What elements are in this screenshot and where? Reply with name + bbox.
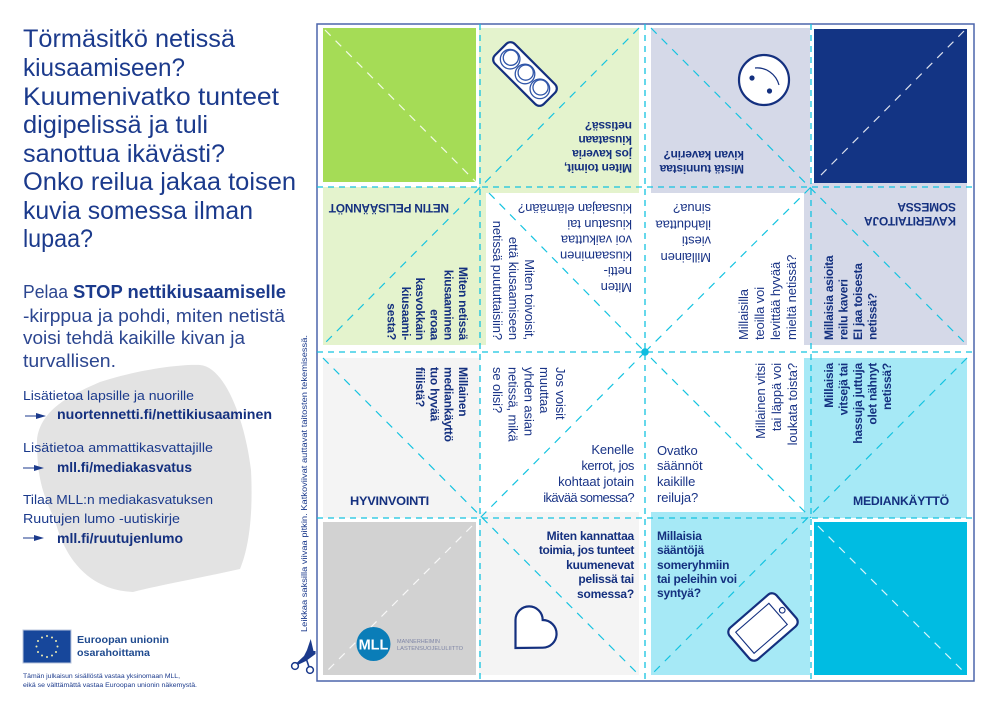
question: spreading good: teoilla voi (752, 287, 767, 340)
panel: online rules (323, 187, 486, 345)
heading: friendship skills: SOMESSA (897, 200, 956, 214)
question: group rules: tai peleihin voi (657, 572, 737, 586)
question: joke hurting: Millainen vitsi (753, 363, 768, 439)
question: intervening: Miten toivoisit, (522, 259, 537, 340)
question: who to tell: Kenelle (591, 442, 634, 457)
question: fair rules: kaikille (657, 474, 695, 489)
link: young people: nuortennetti.fi/nettikiusaaminen (57, 406, 272, 422)
heading: friendship skills: KAVERITAITOJA (864, 214, 956, 228)
question: who to tell: kerrot, jos (581, 458, 635, 473)
question: change one thing: yhden asian (521, 367, 536, 436)
question: good friend: Mistä tunnistaa (659, 162, 744, 176)
MLL logo: LASTENSUOJELULIITTO (397, 646, 464, 652)
title: lupaa? (23, 225, 93, 253)
icon: scissors (292, 639, 316, 673)
question: group rules: syntyä? (657, 586, 701, 600)
icon: tablet (726, 591, 800, 663)
intro text: -kirppua ja pohdi, miten netistä (23, 306, 286, 326)
icon: smiley (739, 55, 789, 105)
link: newsletter: Tilaa MLL:n mediakasvatuksen (23, 492, 213, 507)
question: heated feelings: kuumenevat (566, 558, 634, 572)
question: heated feelings: somessa? (577, 587, 634, 601)
question: change one thing: Jos voisit (553, 367, 568, 420)
question: change one thing: muuttaa (537, 367, 552, 414)
EU logo: osarahoittama (77, 648, 150, 659)
question: message: sinua? (673, 201, 711, 216)
question: joke hurting: tai läppä voi (769, 363, 784, 431)
question: fair rules: Ovatko (657, 443, 698, 458)
question: intervening: että kiusaamiseen (506, 237, 521, 340)
panel: heart flap (479, 512, 639, 675)
question: change one thing: se olisi? (490, 367, 505, 413)
grey blob background (37, 365, 252, 592)
EU logo: Euroopan unionin (77, 635, 169, 646)
question: media use wellbeing: tuo hyvää (427, 367, 441, 422)
question: heated feelings: Miten kannattaa (547, 529, 635, 543)
question: heated feelings: toimia, jos tunteet (539, 543, 634, 557)
link: young people: Lisätietoa lapsille ja nuorille (23, 388, 194, 403)
question: online vs face to face: kasvokkain (413, 277, 427, 340)
question: spreading good: levittää hyvää (768, 261, 783, 340)
icon: traffic light (491, 40, 559, 108)
panel: traffic light flap (479, 28, 639, 193)
question: impact of bullying: voi vaikuttaa (560, 233, 632, 248)
question: fair friend: EI jaa toisesta (851, 263, 865, 340)
panel: grey corner (323, 522, 476, 675)
title: sanottua ikävästi? (23, 140, 225, 168)
panel: green corner (323, 28, 476, 182)
question: friend bullied: netissä? (585, 119, 632, 133)
question: online vs face to face: kiusaami- (399, 287, 413, 340)
heading: online rules: NETIN PELISÄÄNNÖT (328, 201, 449, 216)
title (23, 25, 296, 253)
link: professionals: mll.fi/mediakasvatus (57, 459, 192, 475)
left column intro (23, 25, 296, 371)
heading: wellbeing: HYVINVOINTI (350, 494, 429, 508)
question: impact of bullying: Miten (601, 280, 632, 295)
title: digipelissä ja tuli (23, 111, 208, 139)
question: who to tell: kohtaat jotain (558, 474, 634, 489)
panel: media use (804, 358, 967, 518)
title: kiusaamiseen? (23, 54, 185, 82)
question: online vs face to face: kiusaaminen (442, 270, 456, 340)
question: fair friend: Millaisia asioita (822, 255, 836, 340)
title: Törmäsitkö netissä (23, 25, 235, 53)
link: newsletter (23, 492, 213, 546)
question: fair rules: säännöt (657, 458, 703, 473)
center fold dot (641, 348, 649, 356)
question: spreading good: mieltä netissä? (784, 255, 799, 340)
links block (23, 388, 272, 546)
intro text: voisi tehdä kaikille kivan ja (23, 328, 246, 348)
question: message: viesti (682, 234, 711, 249)
question: group rules: Millaisia (657, 529, 702, 543)
question: impact of bullying: netti- (604, 264, 632, 279)
sheet frame (317, 24, 974, 681)
question: friend bullied: kiusataan (579, 133, 632, 147)
intro text (23, 282, 286, 371)
question: friend bullied: jos kaveria (572, 147, 633, 161)
question: media use wellbeing: fiilistä? (413, 367, 427, 407)
question: media use wellbeing: Millainen (456, 367, 470, 416)
MLL logo: MLL (359, 638, 389, 654)
question: fair rules: reiluja? (657, 490, 698, 505)
MLL logo: MANNERHEIMIN (397, 639, 440, 645)
title: Kuumenivatko tunteet (23, 83, 279, 111)
cutting instruction: Leikkaa saksilla viivaa pitkin. Katkoviivat auttavat taitosten tekemisessä. (299, 335, 309, 632)
question: heated feelings: pelissä tai (578, 572, 634, 586)
link: professionals (23, 440, 213, 475)
intro text: STOP nettikiusaamiselle (73, 282, 286, 302)
question: impact of bullying: kiusaajan elämään? (518, 201, 632, 216)
question: message: Millainen (661, 250, 711, 265)
link: newsletter: Ruutujen lumo -uutiskirje (23, 511, 180, 526)
question: online vs face to face: sesta? (384, 303, 398, 340)
question: funny jokes: vitsejä tai (836, 363, 850, 415)
panel: friendship skills (804, 183, 967, 345)
question: fair friend: netissä? (866, 293, 880, 340)
EU logo (23, 630, 169, 663)
panel: wellbeing (323, 358, 480, 518)
question: spreading good: Millaisilla (736, 288, 751, 340)
question: who to tell: ikävää somessa? (543, 490, 634, 505)
MLL logo (356, 627, 464, 661)
intro text: Pelaa (23, 282, 69, 302)
heading: media use: MEDIANKÄYTTÖ (853, 493, 949, 508)
question: intervening: netissä puututtaisiin? (490, 221, 505, 340)
question: impact of bullying: kiusatun tai (567, 217, 632, 232)
question: funny jokes: olet nähnyt (866, 363, 880, 425)
disclaimer: Tämän julkaisun sisällöstä vastaa yksinomaan MLL, (23, 673, 180, 680)
fortune teller sheet (317, 24, 974, 681)
icon: heart (516, 606, 557, 648)
question: joke hurting: loukata toista? (785, 363, 800, 445)
question: good friend: kivan kaverin? (664, 148, 744, 162)
question: change one thing: netissä, mikä (506, 367, 521, 442)
question: fair friend: reilu kaveri (836, 279, 850, 340)
question: online vs face to face: eroaa (427, 309, 441, 341)
link: young people (23, 388, 272, 422)
title: Onko reilua jakaa toisen (23, 168, 296, 196)
panel: smiley flap (651, 28, 810, 193)
question: funny jokes: Millaisia (822, 362, 836, 408)
question: impact of bullying: kiusaaminen (560, 248, 632, 263)
title: kuvia somessa ilman (23, 197, 253, 225)
question: group rules: someryhmiin (657, 558, 729, 572)
panel: tablet flap (651, 512, 810, 675)
link: professionals: Lisätietoa ammattikasvattajille (23, 440, 213, 455)
link: newsletter: mll.fi/ruutujenlumo (57, 530, 183, 546)
disclaimer (23, 673, 197, 689)
question: friend bullied: Miten toimit, (564, 161, 632, 175)
intro text: turvallisen. (23, 351, 116, 371)
disclaimer: eikä se välttämättä vastaa Euroopan unionin näkemystä. (23, 682, 197, 689)
panel: cyan corner (814, 522, 967, 675)
question: online vs face to face: Miten netissä (456, 267, 470, 341)
question: message: ilahduttaa (655, 217, 711, 232)
panel: navy corner (814, 29, 967, 183)
question: funny jokes: netissä? (880, 363, 894, 410)
question: group rules: sääntöjä (657, 543, 704, 557)
question: media use wellbeing: mediankäyttö (442, 367, 456, 442)
question: funny jokes: hassuja juttuja (851, 362, 865, 444)
